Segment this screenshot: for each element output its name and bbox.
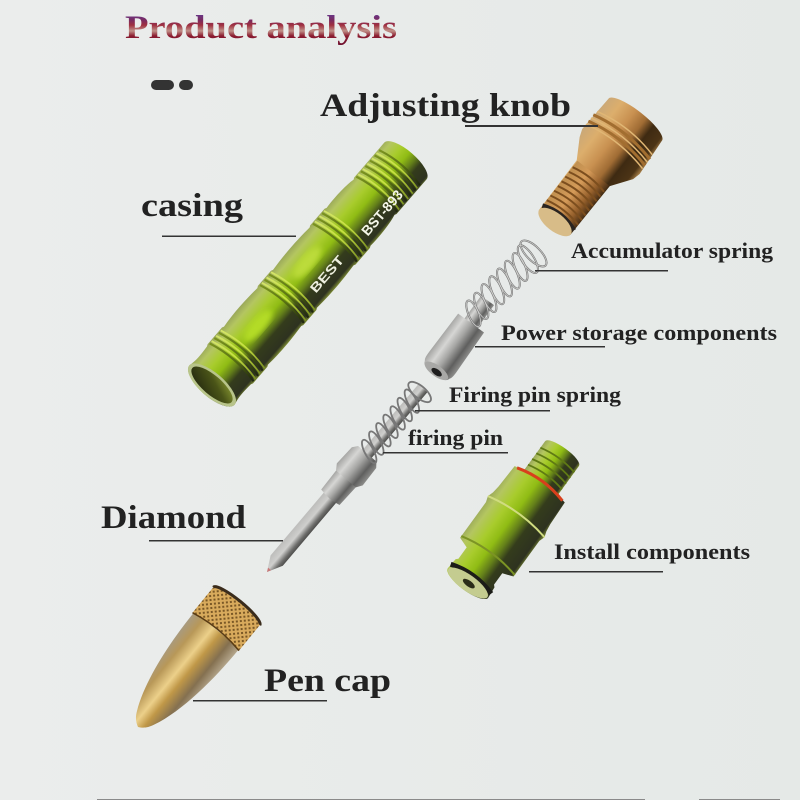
label: Pen cap: Pen cap [264, 663, 391, 699]
label: casing: casing [141, 188, 244, 224]
casing logo: BEST [307, 253, 347, 296]
part: install component [435, 428, 594, 610]
opening of casing [181, 356, 243, 414]
end face [444, 562, 492, 604]
part: accumulator spring [454, 237, 550, 333]
part: adjusting knob [521, 90, 670, 252]
part: power storage component [419, 290, 501, 385]
label: Power storage components: Power storage components [501, 320, 777, 345]
part: firing pin [254, 376, 436, 583]
label: Adjusting knob: Adjusting knob [320, 88, 571, 124]
label: Firing pin spring: Firing pin spring [449, 382, 621, 407]
icon: dark pills [151, 80, 193, 90]
red o-ring [517, 465, 565, 501]
knob end face [534, 203, 576, 241]
casing model number: BST-893 [358, 186, 406, 239]
part: pen cap [115, 582, 264, 746]
black o-ring [451, 561, 494, 594]
label: firing pin: firing pin [408, 425, 503, 450]
label: Accumulator spring: Accumulator spring [571, 238, 773, 263]
firing pin spring [353, 378, 434, 467]
label: Diamond: Diamond [101, 500, 246, 536]
part: casing [181, 134, 435, 414]
knob o-ring [542, 203, 576, 230]
label: firing pin [383, 425, 508, 454]
title: Product analysis [125, 10, 397, 46]
label: Install components: Install components [554, 539, 750, 564]
